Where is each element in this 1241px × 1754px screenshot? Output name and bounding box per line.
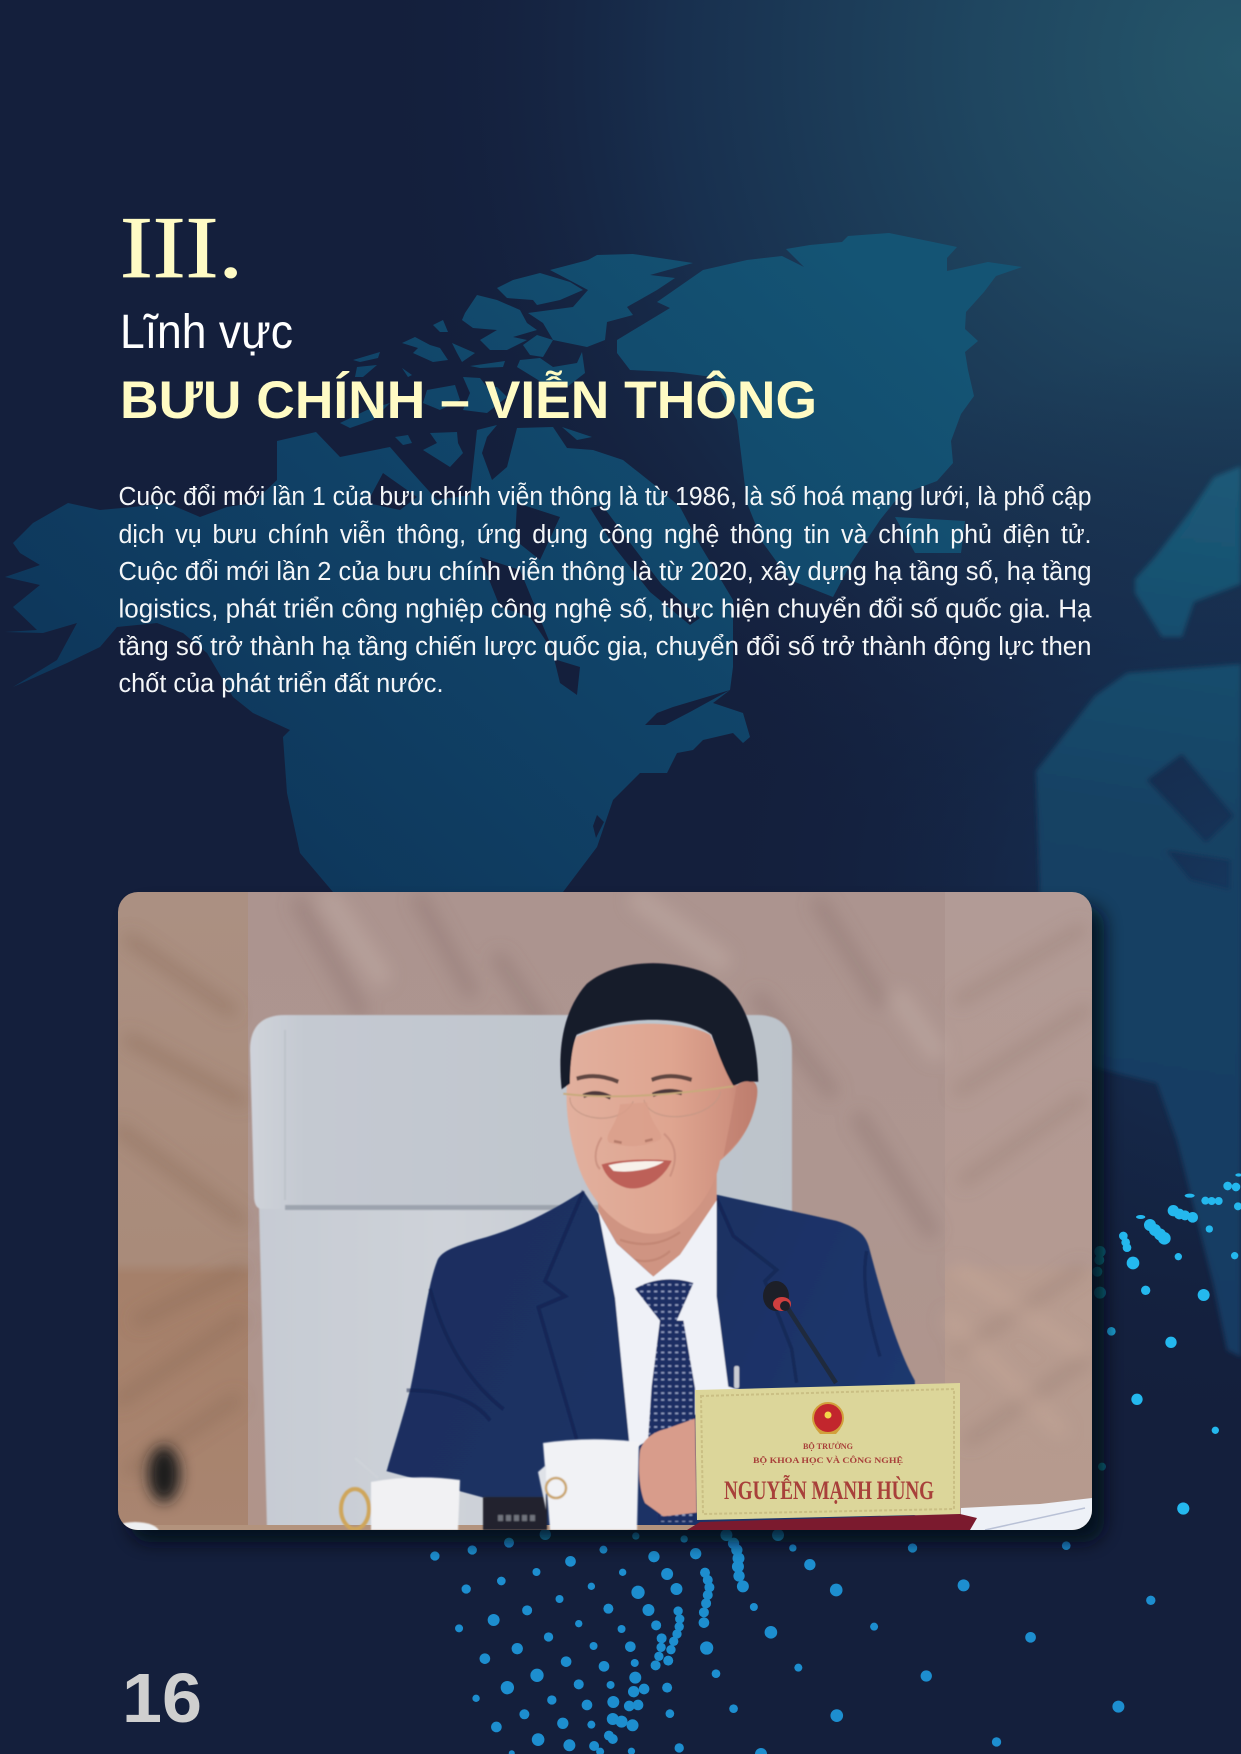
- photo drop shadow: [130, 906, 1104, 1542]
- photo: large white mug: [538, 1439, 639, 1530]
- plaque emblem: [813, 1403, 843, 1434]
- jacket folds: [407, 1191, 880, 1439]
- mainland North America: [5, 425, 750, 892]
- decorative dot field: right cluster: [1092, 1173, 1241, 1515]
- photo: dark blur on wall: [148, 1446, 180, 1502]
- eyes: [583, 1091, 682, 1098]
- body text: Cuộc đổi mới lần 1 của bưu chính viễn thông là từ 1986, là số hoá mạng lưới, là phổ cập: [118, 482, 1092, 511]
- body text: tầng số trở thành hạ tầng chiến lược quốc gia, chuyển đổi số trở thành động lực then: [118, 633, 1092, 661]
- hair: [560, 963, 758, 1089]
- photo wall: wood panels: [118, 892, 1092, 1530]
- world map silhouette: [5, 233, 1241, 1357]
- cheek lines: [596, 1134, 675, 1177]
- plaque text: BỘ TRƯỞNG: [803, 1441, 853, 1451]
- photo: papers on table: [961, 1498, 1092, 1530]
- mouth: [602, 1160, 672, 1189]
- body text: Cuộc đổi mới lần 2 của bưu chính viễn thông là từ 2020, xây dựng hạ tầng số, hạ tầng: [118, 557, 1092, 586]
- title: BƯU CHÍNH – VIỄN THÔNG: [120, 369, 817, 430]
- decorative dot field: bottom cluster: [430, 1502, 1189, 1754]
- plaque text: [724, 1441, 934, 1505]
- glasses: [563, 1086, 733, 1096]
- photo: plaque red base: [687, 1514, 977, 1530]
- neck wrinkles: [620, 1232, 680, 1261]
- photo: name plaque: [695, 1383, 960, 1520]
- eyebrows: [577, 1076, 692, 1082]
- nose: [608, 1104, 628, 1145]
- photo: small white cup with gold handle: [338, 1476, 461, 1530]
- body text: [118, 482, 1092, 698]
- jacket: [387, 1191, 915, 1530]
- shirt: [598, 1200, 740, 1450]
- pen: [734, 1366, 739, 1388]
- plaque text: BỘ KHOA HỌC VÀ CÔNG NGHỆ: [753, 1455, 903, 1465]
- photo: dark object on table: [483, 1497, 547, 1530]
- photo: microphone: [763, 1281, 836, 1383]
- photo: table edge: [118, 1525, 1092, 1530]
- section number: III.: [120, 200, 243, 297]
- plaque text: NGUYỄN MẠNH HÙNG: [724, 1476, 934, 1505]
- body text: dịch vụ bưu chính viễn thông, ứng dụng công nghệ thông tin và chính phủ điện tử.: [118, 520, 1092, 549]
- page number: 16: [122, 1659, 202, 1737]
- photo: chair: [250, 1015, 792, 1530]
- photo: white corner object: [122, 1521, 160, 1530]
- body text: chốt của phát triển đất nước.: [118, 670, 444, 698]
- panel: portrait photo: [111, 892, 1092, 1542]
- tie: [635, 1279, 695, 1522]
- body text: logistics, phát triển công nghiệp công nghệ số, thực hiện chuyển đổi số quốc gia. Hạ: [118, 596, 1092, 624]
- hand: [639, 1418, 697, 1516]
- ear shading: [724, 1096, 758, 1156]
- photo: man in navy suit: [387, 963, 915, 1530]
- face: [567, 1024, 757, 1234]
- neck: [597, 1174, 718, 1277]
- subtitle: Lĩnh vực: [120, 306, 293, 359]
